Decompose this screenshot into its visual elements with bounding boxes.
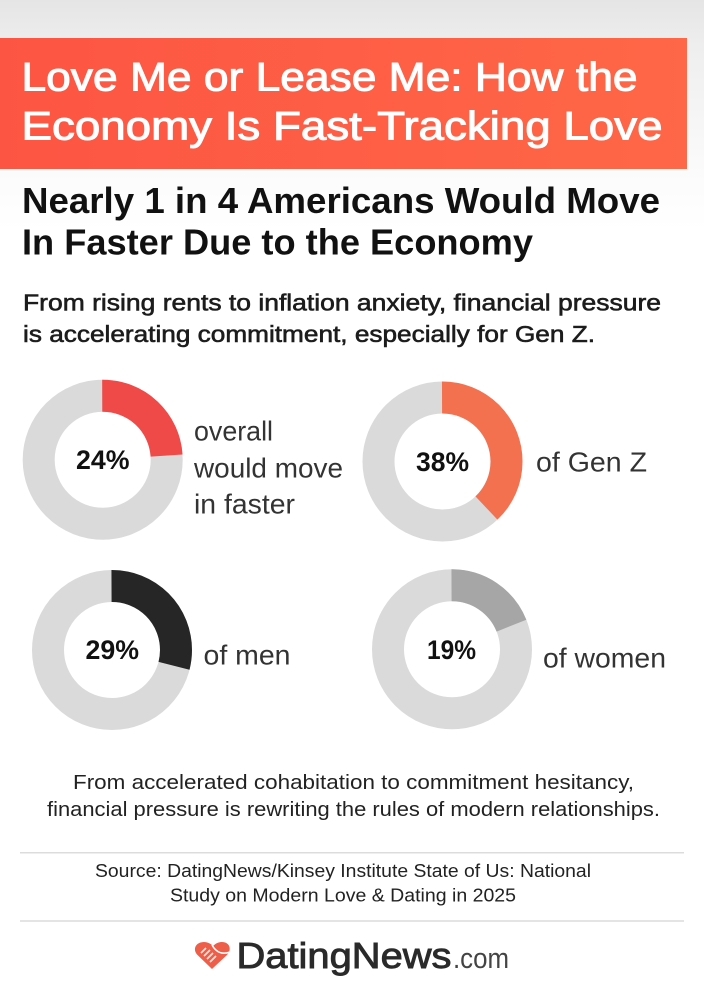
source: Study on Modern Love & Dating in 2025	[170, 886, 516, 906]
donut: women 19%	[388, 585, 516, 713]
donut: Gen Z 38%	[378, 398, 506, 526]
label: of men: of men	[204, 640, 290, 671]
closing statement: From accelerated cohabitation to commitment hesitancy,	[73, 771, 634, 794]
subtitle heading	[22, 180, 660, 262]
logo: DatingNews.com	[195, 935, 509, 976]
intro text	[23, 290, 661, 347]
donut: men 29%: 29%	[86, 635, 139, 665]
title text: Economy Is Fast-Tracking Love	[22, 104, 662, 148]
title text: Love Me or Lease Me: How the	[22, 56, 638, 100]
donut: overall 24%	[39, 396, 167, 524]
intro text: From rising rents to inflation anxiety, financial pressure	[23, 290, 661, 316]
title text	[22, 56, 662, 148]
label: overall would move in faster: would move	[193, 452, 343, 483]
donut: men 29%	[48, 586, 176, 714]
donut: overall 24%: 24%	[76, 445, 130, 475]
label: overall would move in faster	[193, 416, 343, 519]
label: of women: of women	[543, 643, 666, 674]
label: overall would move in faster: overall	[194, 416, 273, 447]
closing statement: financial pressure is rewriting the rules of modern relationships.	[47, 798, 660, 821]
intro text: is accelerating commitment, especially for Gen Z.	[23, 321, 595, 347]
logo: DatingNews.com: .com	[453, 943, 509, 975]
label: of Gen Z: of Gen Z	[536, 447, 647, 478]
closing statement	[47, 771, 660, 821]
donut: women 19%: 19%	[427, 635, 476, 665]
title banner	[0, 38, 687, 169]
donut: Gen Z 38%: 38%	[416, 447, 469, 477]
logo: DatingNews.com: DatingNews	[236, 935, 452, 976]
icon: heart with document	[195, 942, 230, 969]
source: Source: DatingNews/Kinsey Institute State of Us: National	[95, 861, 591, 881]
label: overall would move in faster: in faster	[194, 488, 295, 519]
subtitle heading: Nearly 1 in 4 Americans Would Move	[22, 180, 660, 221]
subtitle heading: In Faster Due to the Economy	[22, 222, 533, 262]
source	[95, 861, 591, 906]
